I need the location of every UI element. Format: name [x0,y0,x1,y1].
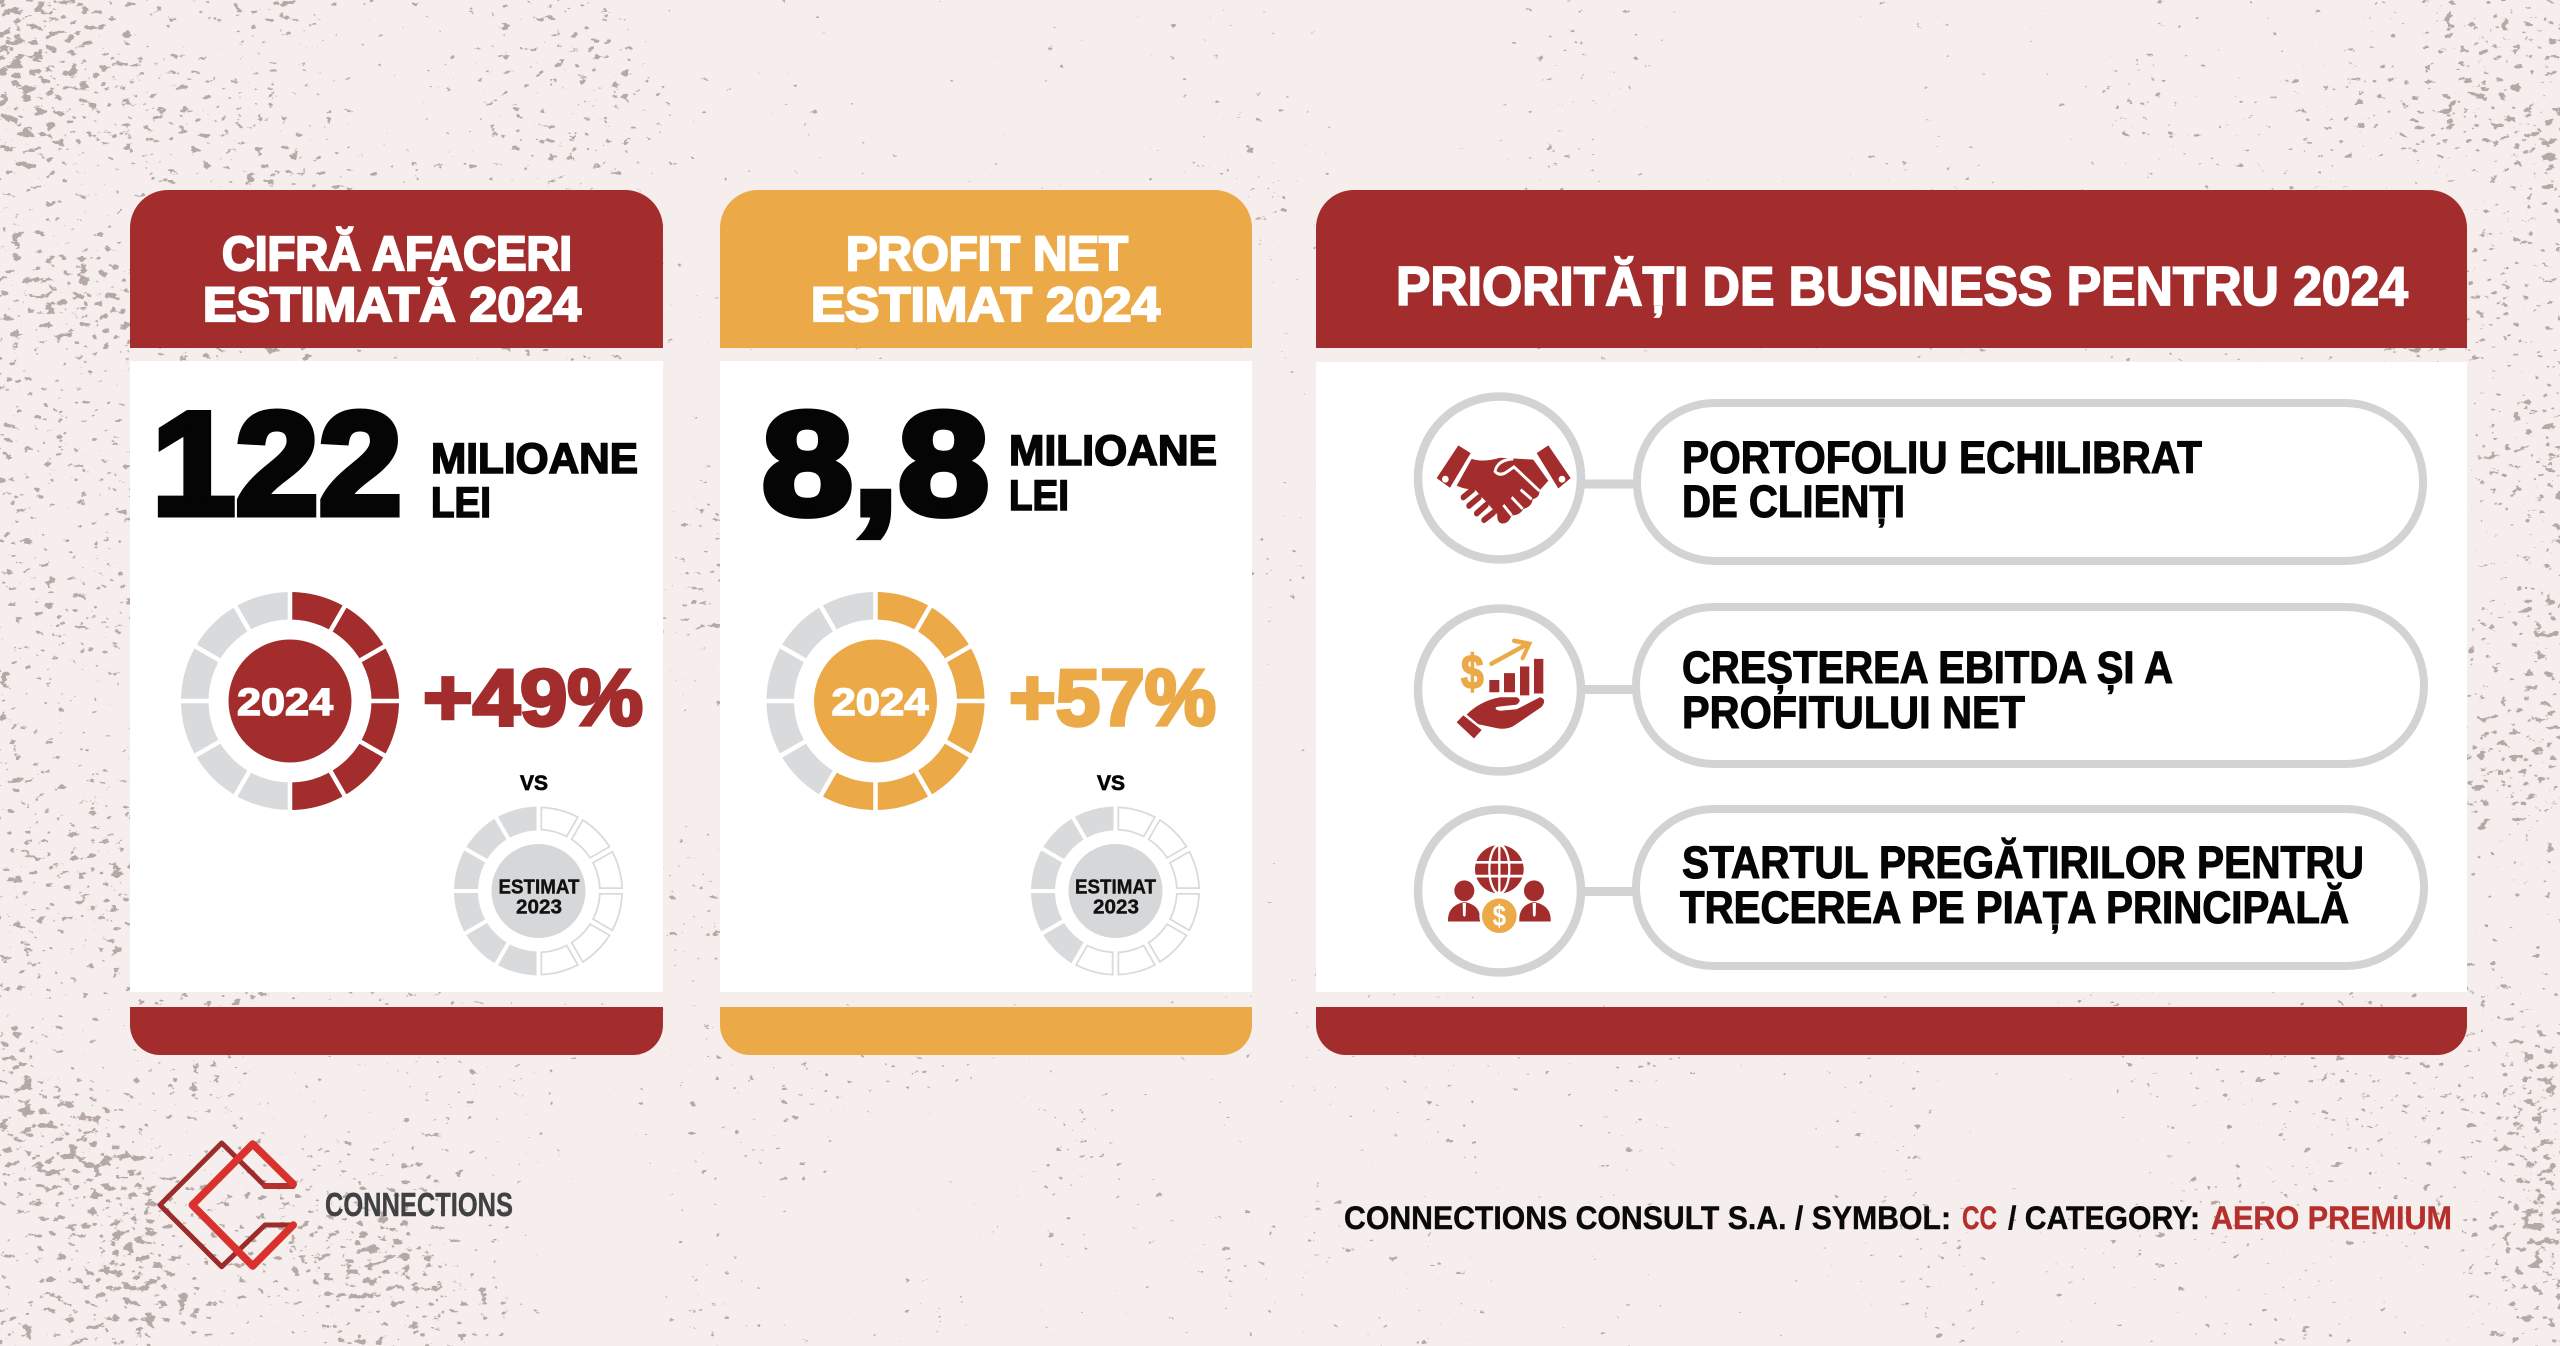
icon circle: hand with rising chart: $ [1461,645,1484,699]
panel header: profit net [720,190,1252,348]
panel body [130,361,663,992]
pill: portofoliu echilibrat: PORTOFOLIU ECHILIBRAT [1682,432,2202,483]
icon circle: globe, people and coin: $ [1493,899,1506,933]
growth figure: +57%: +57% [1009,653,1216,742]
donut chart: estimat 2023 profit [1026,801,1206,981]
big number: 8,8 milioane lei: LEI [1009,472,1069,520]
big number: 122 milioane lei [152,382,638,545]
big number: 8,8 milioane lei: 8,8 [762,382,989,545]
logo: connections [160,1143,513,1267]
donut chart: estimat 2023 revenue [448,801,628,981]
footer line: company, symbol, category: / CATEGORY: [2008,1200,2200,1236]
panel header: cifra afaceri: CIFRĂ AFACERI [222,227,572,281]
panel header: profit net: ESTIMAT 2024 [811,279,1160,332]
pill: cresterea ebitda: CREȘTEREA EBITDA ȘI A [1682,642,2173,693]
footer line: company, symbol, category: CONNECTIONS CONSULT S.A. / SYMBOL: [1344,1200,1951,1236]
panel header: cifra afaceri: ESTIMATĂ 2024 [203,278,581,332]
panel: cifra afaceri [130,190,663,1055]
priority 2: ebitda and net profit growth [1418,607,2424,772]
big number: 8,8 milioane lei [762,382,1217,545]
donut chart: estimat 2023 profit: ESTIMAT [1075,876,1156,898]
icon circle: globe, people and coin [1418,810,1581,972]
panel header: cifra afaceri [130,190,663,348]
icon circle: hand with rising chart [1418,608,1581,772]
pill: cresterea ebitda [1636,607,2424,764]
pill: startul pregatirilor [1636,809,2424,966]
label: vs: VS [1097,772,1125,795]
pill: startul pregatirilor: TRECEREA PE PIAȚA PRINCIPALĂ [1680,882,2349,933]
panel header: profit net: PROFIT NET [846,228,1128,281]
growth figure: +49%: +49% [423,653,643,742]
donut chart: estimat 2023 revenue: 2023 [516,896,562,918]
footer line: company, symbol, category: AERO PREMIUM [2211,1200,2452,1236]
panel body [1316,362,2467,992]
priority 1: balanced client portfolio [1418,396,2423,561]
donut chart: 2024 profit: 2024 [832,682,928,724]
donut chart: 2024 profit [762,588,988,814]
panel footer bar [130,1007,663,1055]
big number: 122 milioane lei: LEI [431,479,491,527]
pill: portofoliu echilibrat: DE CLIENȚI [1682,476,1905,527]
big number: 122 milioane lei: MILIOANE [431,435,638,483]
panel header: priorities: PRIORITĂȚI DE BUSINESS PENTRU 2024 [1396,255,2408,318]
big number: 122 milioane lei: 122 [152,382,402,545]
panel body [720,361,1252,992]
panel header: priorities [1316,190,2467,348]
logo wordmark: CONNECTIONS [325,1186,513,1223]
pill: startul pregatirilor: STARTUL PREGĂTIRILOR PENTRU [1682,837,2364,888]
donut chart: estimat 2023 revenue: ESTIMAT [498,876,580,898]
icon circle: handshake [1418,396,1581,560]
donut chart: estimat 2023 profit: 2023 [1093,896,1139,918]
panel: profit net [720,190,1252,1055]
priority 3: main market preparation [1418,809,2424,972]
pill: cresterea ebitda: PROFITULUI NET [1682,687,2025,738]
footer line: company, symbol, category [1344,1200,2452,1236]
panel footer bar [720,1007,1252,1055]
panel footer bar [1316,1007,2467,1055]
big number: 8,8 milioane lei: MILIOANE [1009,427,1217,475]
logo mark [160,1143,293,1267]
donut chart: 2024 revenue [177,588,403,814]
footer line: company, symbol, category: CC [1962,1200,1997,1236]
label: vs: VS [520,772,548,795]
pill: portofoliu echilibrat [1637,403,2423,561]
donut chart: 2024 revenue: 2024 [237,682,333,724]
panel: business priorities [1316,190,2467,1055]
